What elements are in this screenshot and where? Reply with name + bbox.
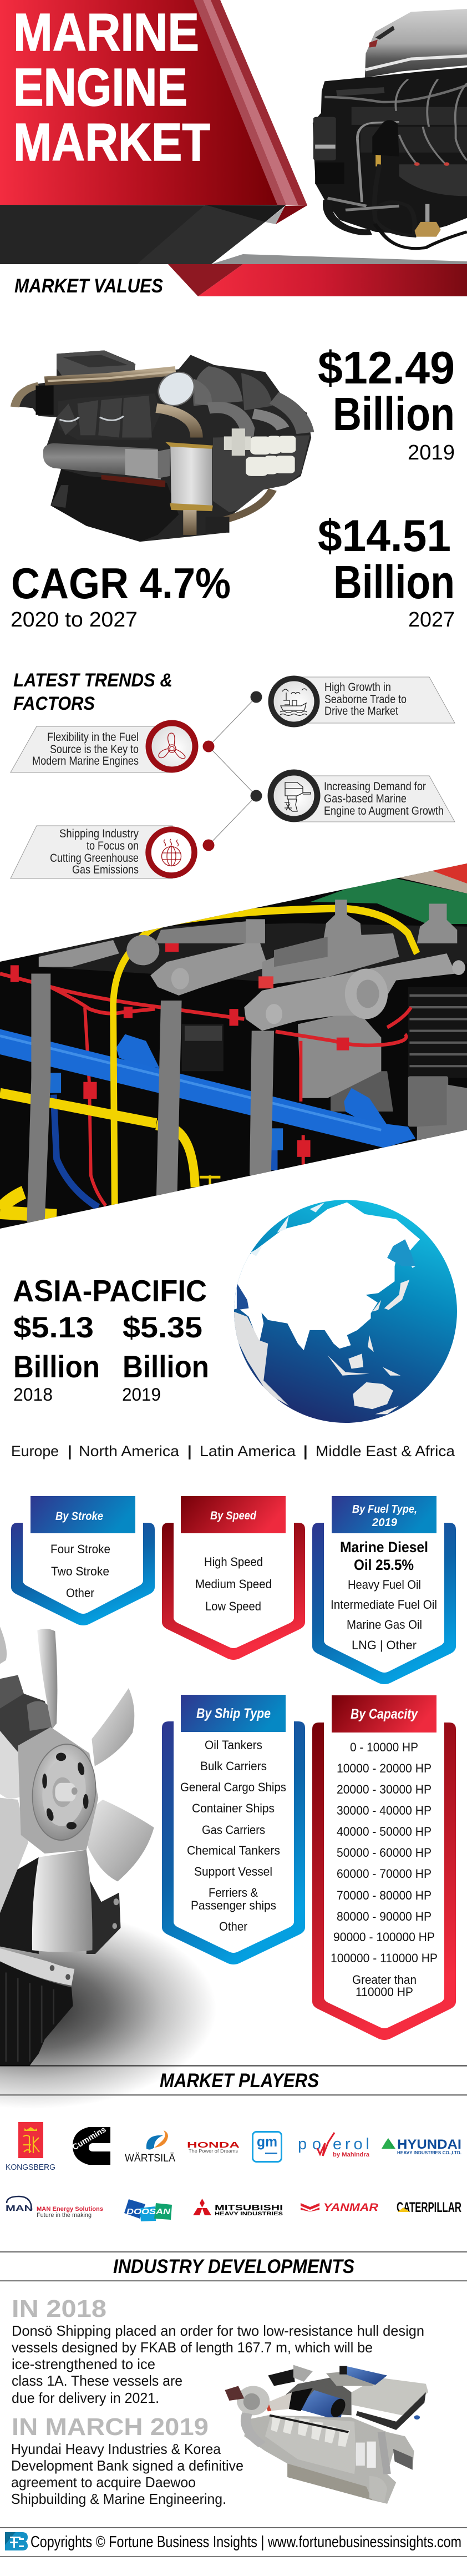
card: by capacity: 60000 - 70000 HP: [337, 1867, 432, 1881]
trend: seaborne trade: Seaborne Trade to: [324, 693, 407, 706]
card: by capacity: 20000 - 30000 HP: [337, 1782, 432, 1796]
development: March 2019: Hyundai Heavy Industries & Korea: [11, 2441, 221, 2457]
value 2027: $14.51: [318, 511, 451, 561]
logo: MAN Energy Solutions: MAN Energy Solutions: [37, 2206, 103, 2213]
logo: Kongsberg: KONGSBERG: [6, 2163, 55, 2172]
Asia-Pacific values: $5.13: [13, 1311, 94, 1344]
trend: fuel flexibility: Source is the Key to: [50, 743, 139, 756]
other regions: Latin America: [200, 1443, 296, 1459]
development: 2018: vessels designed by FKAB of length 167.7 m, which will be: [12, 2339, 373, 2356]
logo: Kongsberg: [6, 2122, 55, 2172]
value 2019: 2019: [408, 441, 455, 464]
trend: fuel flexibility: [11, 723, 214, 772]
card: by fuel type: [312, 1496, 456, 1684]
market values heading: [14, 254, 467, 297]
card: by stroke: Other: [66, 1586, 94, 1600]
development: March 2019: agreement to acquire Daewoo: [11, 2474, 196, 2491]
market players heading: MARKET PLAYERS: [160, 2070, 319, 2092]
trend: greenhouse gas: to Focus on: [87, 840, 139, 852]
connector lines: [209, 697, 256, 845]
logo: Hyundai Heavy Industries: HEAVY INDUSTRIES CO.,LTD.: [397, 2150, 461, 2155]
CAGR: 2020 to 2027: [11, 608, 138, 632]
trend: seaborne trade: [251, 677, 455, 725]
card: by capacity: 0 - 10000 HP: [350, 1740, 418, 1754]
value 2027: 2027: [408, 608, 455, 632]
card: by fuel type: Heavy Fuel Oil: [348, 1578, 421, 1592]
card: by fuel type: LNG | Other: [352, 1638, 417, 1652]
logo: Powerol: [298, 2133, 370, 2158]
development: March 2019: Development Bank signed a definitive: [11, 2457, 243, 2474]
card: by capacity: Greater than: [352, 1973, 417, 1987]
logo: Mitsubishi Heavy Industries: MITSUBISHI: [215, 2203, 283, 2213]
logo: Honda: HONDA: [187, 2140, 240, 2150]
image: large grey marine engine: [12, 350, 311, 542]
industry developments heading: INDUSTRY DEVELOPMENTS: [113, 2256, 354, 2277]
card: by capacity: 90000 - 100000 HP: [333, 1930, 435, 1944]
trend: greenhouse gas: [11, 826, 214, 878]
logo: Honda: [187, 2140, 240, 2154]
development: March 2019: Shipbuilding & Marine Engineering.: [11, 2491, 226, 2507]
logo: Hyundai Heavy Industries: HYUNDAI: [397, 2137, 461, 2152]
title: [13, 3, 210, 172]
value 2019: [318, 342, 455, 464]
card: by speed: [162, 1496, 305, 1660]
card: by speed: High Speed: [204, 1555, 263, 1569]
card: by stroke: [11, 1496, 155, 1625]
logo: Powerol: po: [298, 2135, 321, 2153]
trend: greenhouse gas: Gas Emissions: [72, 863, 139, 876]
development: 2018: due for delivery in 2021.: [12, 2390, 159, 2406]
other regions: North America: [79, 1443, 180, 1459]
Asia-Pacific values: 2019: [122, 1385, 161, 1405]
card: by capacity: 80000 - 90000 HP: [337, 1910, 432, 1923]
Asia-Pacific values: ASIA-PACIFIC: [13, 1274, 207, 1308]
logo: Powerol: by Mahindra: [333, 2151, 370, 2158]
card: by fuel type: Marine Gas Oil: [347, 1618, 422, 1632]
other regions: Middle East & Africa: [316, 1443, 455, 1459]
value 2019: $12.49: [318, 342, 455, 393]
footer: [0, 2527, 467, 2557]
logo: MAN Energy Solutions: Future in the making: [37, 2212, 92, 2219]
trend: gas-based engine: [251, 772, 455, 822]
card: by capacity: 50000 - 60000 HP: [337, 1846, 432, 1860]
card: by fuel type: 2019: [372, 1517, 398, 1529]
development: 2018: class 1A. These vessels are: [12, 2372, 182, 2389]
header banner: [0, 0, 307, 264]
trend: seaborne trade: Drive the Market: [324, 705, 398, 718]
card: by ship type: Gas Carriers: [202, 1823, 265, 1837]
development: 2018: ice-strengthened to ice: [12, 2356, 155, 2372]
card: by fuel type: Oil 25.5%: [354, 1557, 414, 1573]
card: by ship type: Other: [219, 1920, 247, 1933]
card: by capacity: [312, 1695, 456, 2040]
title: MARKET: [13, 113, 210, 172]
logo: Cummins: [70, 2125, 110, 2165]
card: by speed: Medium Speed: [195, 1577, 272, 1591]
card: by stroke: Four Stroke: [50, 1542, 110, 1556]
Asia-Pacific values: $5.35: [123, 1311, 202, 1344]
development: 2018: IN 2018: [12, 2295, 106, 2322]
latest trends heading: LATEST TRENDS &: [13, 670, 172, 691]
trend: seaborne trade: High Growth in: [324, 681, 391, 694]
trend: gas-based engine: Gas-based Marine: [324, 792, 407, 805]
title: MARINE: [13, 3, 199, 62]
logo: Yanmar: YANMAR: [323, 2202, 378, 2214]
trend: fuel flexibility: Flexibility in the Fuel: [47, 731, 139, 744]
card: by fuel type: Intermediate Fuel Oil: [331, 1598, 437, 1612]
card: by capacity: By Capacity: [351, 1706, 418, 1722]
logo: MAN Energy Solutions: MAN: [6, 2204, 33, 2213]
card: by ship type: By Ship Type: [196, 1706, 271, 1721]
trend: gas-based engine: Increasing Demand for: [324, 780, 426, 793]
CAGR: CAGR 4.7%: [11, 559, 231, 608]
card: by ship type: Ferriers &: [209, 1886, 258, 1900]
logo: MAN Energy Solutions: [6, 2196, 103, 2219]
Asia-Pacific values: [13, 1274, 209, 1405]
logo: Hyundai Heavy Industries: [382, 2137, 461, 2155]
trend: greenhouse gas: Shipping Industry: [59, 827, 139, 840]
image: engine pipework photo: [0, 849, 467, 1238]
Asia-Pacific values: Billion: [123, 1349, 209, 1384]
card: by capacity: 40000 - 50000 HP: [337, 1825, 432, 1838]
development: March 2019: IN MARCH 2019: [12, 2413, 209, 2441]
logo: Powerol: erol: [333, 2135, 369, 2153]
logo: Doosan: [124, 2199, 172, 2221]
card: by capacity: 30000 - 40000 HP: [337, 1804, 432, 1817]
other regions: |: [303, 1443, 308, 1459]
card: by capacity: 10000 - 20000 HP: [337, 1761, 432, 1775]
logo: Wartsila: [125, 2130, 175, 2164]
other regions: |: [187, 1443, 192, 1459]
trend: fuel flexibility: Modern Marine Engines: [32, 755, 139, 767]
value 2027: [318, 511, 455, 632]
logo: Mitsubishi Heavy Industries: HEAVY INDUSTRIES: [215, 2211, 283, 2216]
development: 2018: Donsö Shipping placed an order for two low-resistance hull design: [12, 2322, 424, 2339]
card: by stroke: By Stroke: [55, 1510, 103, 1523]
other regions: [11, 1443, 455, 1459]
card: by capacity: 70000 - 80000 HP: [337, 1888, 432, 1902]
logo: Mitsubishi Heavy Industries: [193, 2199, 283, 2216]
CAGR: [11, 559, 231, 632]
card: by ship type: Chemical Tankers: [187, 1843, 280, 1857]
card: by capacity: 110000 HP: [356, 1985, 413, 1999]
logo: GM: [253, 2132, 282, 2162]
image: globe centred on Asia-Pacific: [232, 1200, 457, 1423]
other regions: |: [68, 1443, 72, 1459]
card: by ship type: Container Ships: [192, 1801, 275, 1815]
card: by ship type: Support Vessel: [194, 1865, 272, 1878]
logo: GM: gm: [257, 2133, 277, 2150]
logo: Yanmar: [301, 2202, 378, 2214]
logo: Honda: The Power of Dreams: [189, 2149, 238, 2154]
latest trends heading: FACTORS: [13, 693, 95, 714]
development: 2018: [12, 2295, 424, 2406]
logo: Cummins: Cummins: [70, 2125, 108, 2152]
card: by capacity: 100000 - 110000 HP: [331, 1951, 438, 1965]
card: by speed: Low Speed: [205, 1599, 261, 1613]
trend: greenhouse gas: Cutting Greenhouse: [50, 852, 139, 865]
Asia-Pacific values: Billion: [13, 1349, 100, 1384]
image: top marine engine: [313, 9, 467, 249]
card: by stroke: Two Stroke: [51, 1564, 109, 1578]
title: ENGINE: [13, 58, 187, 117]
card: by fuel type: By Fuel Type,: [352, 1503, 417, 1516]
image: engine fan: [0, 1627, 216, 2109]
development: March 2019: [11, 2413, 243, 2507]
logo: Wartsila: WÄRTSILÄ: [125, 2153, 175, 2164]
latest trends heading: [13, 670, 172, 714]
Asia-Pacific values: 2018: [13, 1385, 53, 1405]
trend: gas-based engine: Engine to Augment Growth: [324, 805, 444, 817]
market values heading: MARKET VALUES: [14, 275, 163, 297]
card: by ship type: Passenger ships: [191, 1898, 276, 1912]
card: by ship type: Oil Tankers: [205, 1738, 262, 1752]
image: silver marine engine: [225, 2365, 428, 2504]
card: by speed: By Speed: [210, 1509, 257, 1522]
card: by fuel type: Marine Diesel: [340, 1539, 428, 1555]
card: by ship type: [162, 1695, 305, 1964]
logo: Doosan: DOOSAN: [126, 2207, 171, 2216]
card: by ship type: Bulk Carriers: [200, 1759, 267, 1773]
other regions: Europe: [11, 1443, 59, 1459]
card: by ship type: General Cargo Ships: [180, 1780, 286, 1794]
